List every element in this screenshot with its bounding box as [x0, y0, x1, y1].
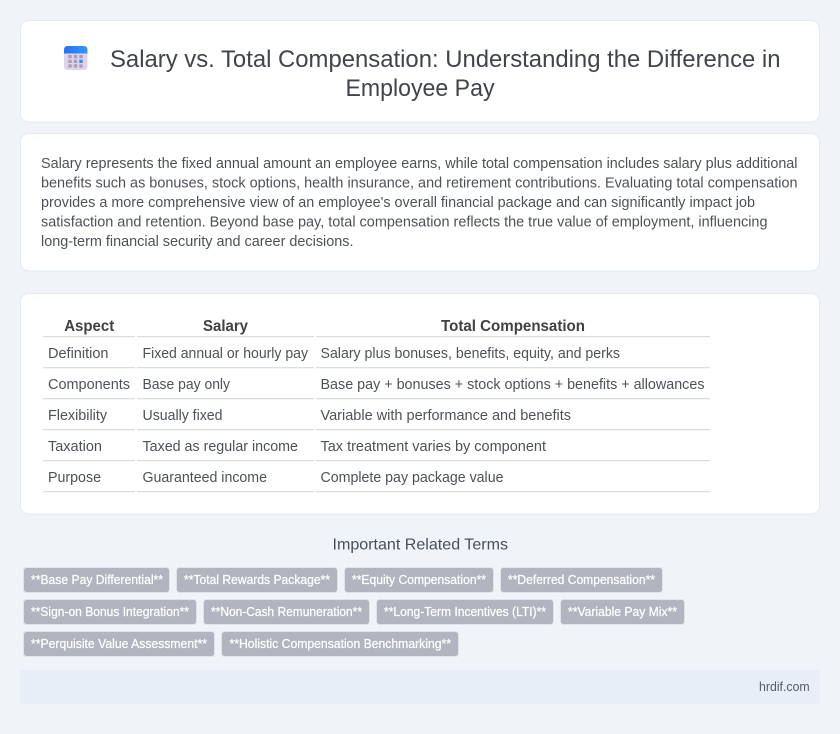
table row: purpose [48, 470, 504, 486]
table row: components: Base pay + bonuses + stock options + benefits + allowances [320, 377, 704, 393]
table row: flexibility: Variable with performance and benefits [320, 408, 571, 424]
table header row [64, 318, 585, 335]
table row: definition: Fixed annual or hourly pay [142, 346, 309, 362]
tag: **Total Rewards Package** [184, 573, 330, 587]
table row: definition: Definition [48, 346, 108, 362]
text block: summary paragraph: Salary represents the fixed annual amount an employee earns, while total compensation includes salary plus additional [41, 156, 798, 172]
table header row: Aspect [64, 318, 115, 335]
tag [376, 600, 554, 624]
tag [204, 600, 370, 624]
text block: summary paragraph: benefits such as bonuses, stock options, health insurance, and retirement contributions. Evaluating total compensation [41, 176, 798, 192]
tag [176, 568, 338, 592]
footer bar [20, 670, 820, 704]
table row: components: Components [48, 377, 130, 393]
tag [222, 632, 458, 656]
table row: taxation [48, 439, 546, 455]
table row: flexibility: Usually fixed [142, 408, 222, 424]
text block: summary paragraph: long-term financial security and career decisions. [41, 234, 354, 250]
tag: **Deferred Compensation** [508, 573, 655, 587]
table row: purpose: Guaranteed income [142, 470, 267, 486]
icon: calendar [64, 46, 88, 70]
table row: components: Base pay only [142, 377, 231, 393]
tag: **Sign-on Bonus Integration** [31, 605, 189, 619]
table header row: Salary [203, 318, 248, 335]
tag [24, 568, 170, 592]
table row: flexibility [48, 408, 571, 424]
footer source text: hrdif.com [759, 680, 810, 694]
table row: taxation: Tax treatment varies by component [320, 439, 546, 455]
tag [500, 568, 662, 592]
text block: summary paragraph: satisfaction and retention. Beyond base pay, total compensation reflects the true value of employment, influencing [41, 214, 768, 230]
tag: **Long-Term Incentives (LTI)** [384, 605, 546, 619]
table row: taxation: Taxation [48, 439, 102, 455]
title: Employee Pay [346, 75, 494, 102]
table row: definition [48, 346, 620, 362]
title: Salary vs. Total Compensation: Understanding the Difference in [110, 46, 780, 73]
text block: summary paragraph [41, 156, 798, 250]
panel: comparison table [20, 294, 820, 514]
tag: **Perquisite Value Assessment** [31, 637, 207, 651]
tag [560, 600, 684, 624]
text block: summary paragraph: provides a more comprehensive view of an employee's overall financial package and can significantly impact job [41, 195, 755, 211]
tag [24, 600, 196, 624]
heading: related terms: Important Related Terms [332, 536, 508, 554]
tag: **Base Pay Differential** [31, 573, 163, 587]
table header row: Total Compensation [441, 318, 585, 335]
panel: summary [20, 134, 820, 271]
table row: purpose: Complete pay package value [320, 470, 504, 486]
tag [24, 632, 214, 656]
panel: header [20, 20, 820, 122]
tag: **Holistic Compensation Benchmarking** [230, 637, 451, 651]
tag list: related terms [24, 568, 684, 656]
tag: **Variable Pay Mix** [568, 605, 677, 619]
table row: flexibility: Flexibility [48, 408, 108, 424]
table row: definition: Salary plus bonuses, benefits, equity, and perks [320, 346, 620, 362]
tag: **Non-Cash Remuneration** [211, 605, 362, 619]
tag [344, 568, 494, 592]
title [110, 46, 780, 102]
table row: components [48, 377, 704, 393]
table row: purpose: Purpose [48, 470, 101, 486]
tag: **Equity Compensation** [352, 573, 486, 587]
table row: taxation: Taxed as regular income [142, 439, 298, 455]
